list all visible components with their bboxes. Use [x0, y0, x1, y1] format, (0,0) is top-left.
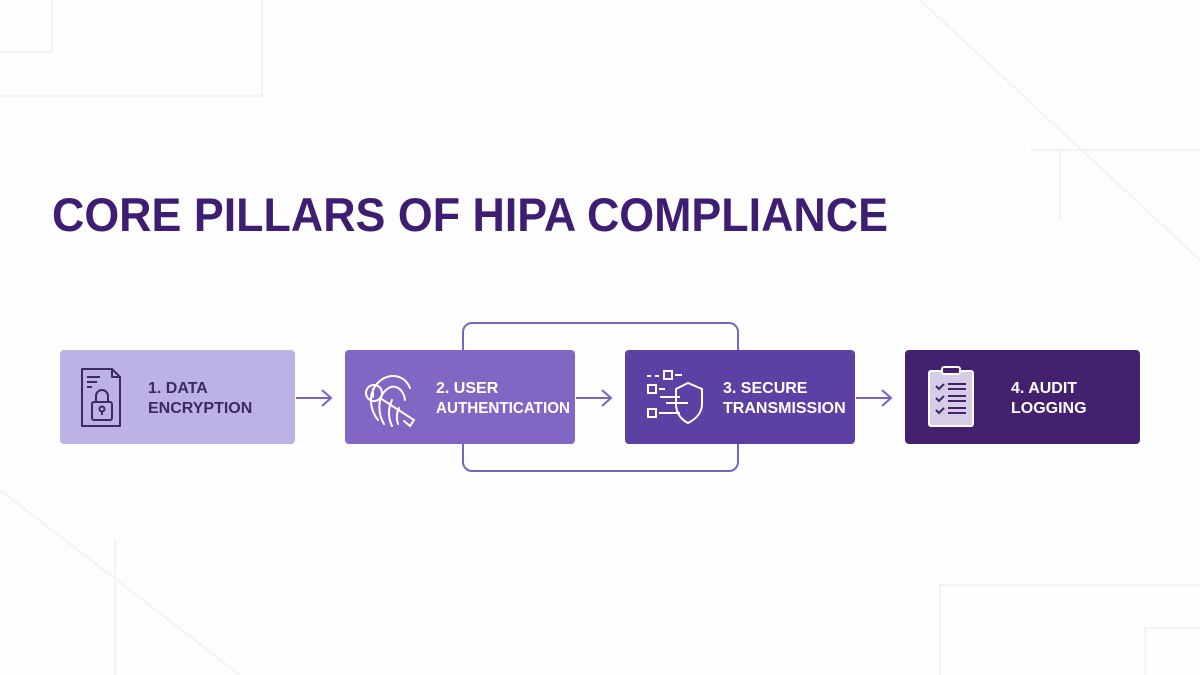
label: 3. SECURE — [723, 380, 808, 397]
title: CORE PILLARS OF HIPA COMPLIANCE — [52, 188, 888, 241]
arrow 1 — [296, 390, 331, 406]
panel: 4 audit logging — [905, 350, 1140, 444]
label: 1. DATA — [148, 380, 208, 397]
label: ENCRYPTION — [148, 400, 252, 417]
arrow 3 — [856, 390, 891, 406]
label: 4. AUDIT — [1011, 380, 1077, 397]
label: LOGGING — [1011, 400, 1087, 417]
icon: shield data — [647, 371, 702, 423]
icon: document lock — [82, 369, 120, 426]
panel: 1 data encryption — [60, 350, 295, 444]
icon: fingerprint key — [366, 376, 414, 426]
panel: 3 secure transmission — [625, 350, 855, 444]
label: TRANSMISSION — [723, 400, 846, 417]
panel: 2 user authentication — [345, 350, 575, 444]
arrow 2 — [576, 390, 611, 406]
icon: clipboard — [929, 367, 973, 426]
label: 2. USER — [436, 380, 499, 397]
label: AUTHENTICATION — [436, 400, 570, 417]
loop connector — [463, 323, 738, 471]
